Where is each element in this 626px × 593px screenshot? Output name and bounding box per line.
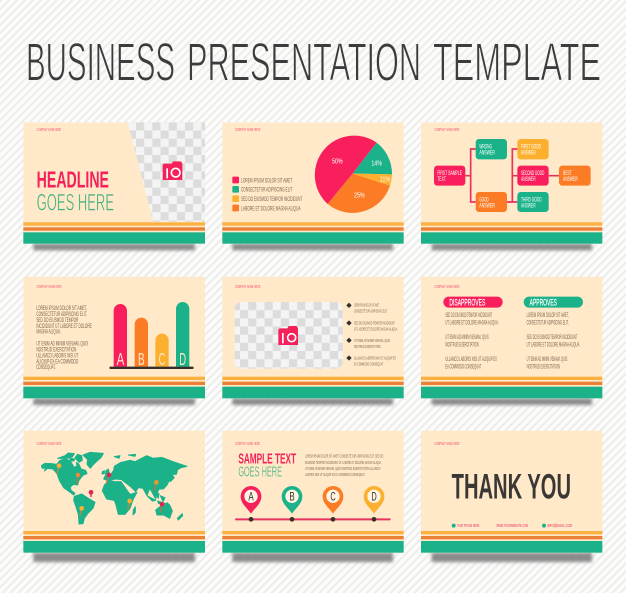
body text: UT ENIM AD MINIM VENIAM, QUIS [36, 341, 88, 347]
slide 3: flowchart: COMPANY NAME HERE [434, 127, 460, 132]
body text: ULLAMCO LABORIS NISI UT [36, 353, 79, 359]
icon: camera [163, 161, 182, 180]
pie: 11% [380, 175, 390, 184]
bars: D [179, 349, 186, 369]
map pins [57, 463, 164, 517]
pie: 50% [332, 157, 343, 166]
disapproves column: UT ENIM AD MINIM VENIAM, QUIS [445, 335, 489, 341]
disapproves column [443, 297, 503, 370]
flow boxes: BEST [563, 170, 572, 177]
slide 7: world map: COMPANY NAME HERE [37, 441, 61, 446]
bars: C [159, 349, 165, 369]
pins: C [330, 491, 336, 504]
flow boxes: ANSWER [479, 203, 495, 210]
legend [232, 177, 303, 213]
disapproves column: ULLAMCO LABORIS NISI UT ALIQUIP EX [445, 357, 497, 363]
image placeholder [235, 302, 343, 369]
slide 8: timeline: COMPANY NAME HERE [235, 441, 260, 446]
bullet list: UT ENIM AD MINIM VENIAM, QUIS [354, 338, 390, 343]
slide 9: thank you: COMPANY NAME HERE [434, 441, 460, 446]
slide 5: image and bullets: COMPANY NAME HERE [235, 284, 260, 289]
map [41, 452, 187, 524]
flow boxes [434, 139, 591, 212]
contact row: INFO@EMAIL.COM [547, 523, 572, 528]
slide 4: bar chart [23, 277, 205, 405]
flow boxes: TEXT [437, 176, 446, 183]
bullet list: EA COMMODO CONSEQUAT [354, 362, 383, 367]
flow boxes: ANSWER [521, 176, 536, 183]
title: BUSINESS [26, 32, 175, 92]
heading: SAMPLE TEXT [238, 452, 296, 468]
timeline line [235, 518, 391, 520]
subheadline: GOES HERE [37, 191, 114, 217]
approves column [524, 297, 583, 370]
body text: ALIQUIP EX EA COMMODO [36, 359, 79, 365]
body text: SED DO EIUSMOD TEMPOR [36, 318, 79, 324]
pins: D [371, 491, 377, 504]
slide 6: approves and disapproves: SED DO EIUSMOD TEMPOR INCIDIDUNT [445, 313, 492, 319]
slide 6: approves and disapproves [421, 277, 602, 405]
bullet list: NOSTRUD EXERCITATION [354, 344, 381, 349]
flow boxes: GOOD [479, 197, 489, 204]
approves column: CONSECTETUR ADIPISCING ELIT, [527, 320, 569, 326]
approves column: UT ENIM AD MINIM VENIAM, QUIS [527, 357, 567, 363]
paragraph: LABORIS NISI UT ALIQUIP EX EA COMMODO CONSEQUAT. [305, 472, 365, 477]
timeline dots [249, 517, 376, 522]
pie: 14% [371, 159, 382, 168]
approves column: LOREM IPSUM DOLOR SIT AMET, [527, 313, 569, 319]
body text: CONSECTETUR ADIPISCING ELIT, [36, 312, 87, 318]
pins: A [248, 491, 254, 504]
flow boxes: ANSWER [563, 176, 578, 183]
slide 2: pie chart [222, 122, 404, 250]
slide 5: image and bullets: ULLAMCO LABORIS NISI UT ALIQUIP EX [354, 356, 396, 361]
slide 8: timeline [222, 431, 404, 562]
slide 5: image and bullets [222, 277, 404, 405]
paragraph [305, 454, 384, 477]
flow boxes: ANSWER [479, 150, 495, 157]
body text: INCIDIDUNT UT LABORE ET DOLORE [36, 324, 92, 330]
legend: SED DO EIUSMOD TEMPOR INCIDIDUNT [241, 197, 303, 203]
contact row [452, 523, 572, 528]
approves column: NOSTRUD EXERCITATION [527, 364, 560, 370]
slide 5: image and bullets: UT LABORE ET DOLORE MAGNA ALIQUA [354, 326, 398, 331]
slide 8: timeline: LOREM IPSUM DOLOR SIT AMET, CONSECTETUR ADIPISCING ELIT, SED DO [305, 454, 384, 459]
contact row: YOUR PHONE HERE [457, 523, 479, 528]
slide 8: timeline: UT ENIM AD MINIM VENIAM, QUIS NOSTRUD EXERCITATION ULLAMCO [305, 466, 381, 471]
body text: LOREM IPSUM DOLOR SIT AMET, [36, 306, 87, 312]
bullet list [346, 303, 398, 367]
body text: CONSEQUAT. [36, 365, 56, 371]
slide 6: approves and disapproves: COMPANY NAME HERE [434, 284, 460, 289]
title: PRESENTATION [187, 32, 421, 92]
flow boxes: WRONG [479, 144, 492, 151]
disapproves column: DISAPPROVES [449, 297, 485, 307]
slide 5: image and bullets: SED DO EIUSMOD TEMPOR INCIDIDUNT [354, 320, 395, 325]
pie [315, 136, 392, 213]
slide 6: approves and disapproves: UT LABORE ET DOLORE MAGNA ALIQUA. [445, 320, 499, 326]
flow boxes: THIRD GOOD [521, 197, 542, 204]
subheading: GOES HERE [238, 465, 282, 481]
approves column: APPROVES [530, 297, 557, 307]
pie: 25% [354, 191, 365, 200]
body text: MAGNA ALIQUA. [36, 330, 61, 336]
bars: B [138, 349, 145, 369]
flow boxes: FIRST GOOD [521, 144, 541, 151]
flow boxes: SECOND GOOD [521, 170, 545, 177]
disapproves column: EA COMMODO CONSEQUAT [445, 364, 481, 370]
icon: camera [278, 326, 298, 345]
contact row: WWW.YOURWEBSITE.COM [496, 523, 528, 528]
slide 7: world map [23, 431, 205, 562]
headline: HEADLINE [37, 166, 109, 192]
connectors [465, 149, 559, 202]
slide 8: timeline: EIUSMOD TEMPOR INCIDIDUNT UT LABORE ET DOLORE MAGNA ALIQUA. [305, 460, 382, 465]
legend: LOREM IPSUM DOLOR SIT AMET [241, 178, 293, 184]
pins: B [289, 491, 295, 504]
bars: A [117, 349, 125, 369]
slide 2: pie chart: COMPANY NAME HERE [235, 127, 260, 132]
slide 3: flowchart [421, 122, 602, 250]
slide 1: headline: COMPANY NAME HERE [37, 127, 61, 132]
legend: LABORE ET DOLORE MAGNA ALIQUA [241, 207, 301, 213]
flow boxes: FIRST SAMPLE [437, 170, 462, 177]
flow boxes: ANSWER [521, 203, 536, 210]
pins [241, 486, 384, 514]
flow boxes: ANSWER [521, 150, 536, 157]
slide 4: bar chart: COMPANY NAME HERE [37, 284, 62, 289]
slide 1: headline [23, 122, 205, 250]
legend: CONSECTETUR ADIPISCING ELIT [241, 188, 293, 194]
disapproves column: NOSTRUD EXERCITATION [445, 342, 479, 348]
bullet list: CONSECTETUR ADIPISCING ELIT [354, 309, 387, 314]
slide 9: thank you [421, 431, 602, 562]
body text: NOSTRUD EXERCITATION [36, 347, 76, 353]
body text [36, 306, 92, 371]
bullet list: LOREM IPSUM DOLOR SIT AMET, [354, 303, 379, 308]
bars [109, 302, 194, 369]
